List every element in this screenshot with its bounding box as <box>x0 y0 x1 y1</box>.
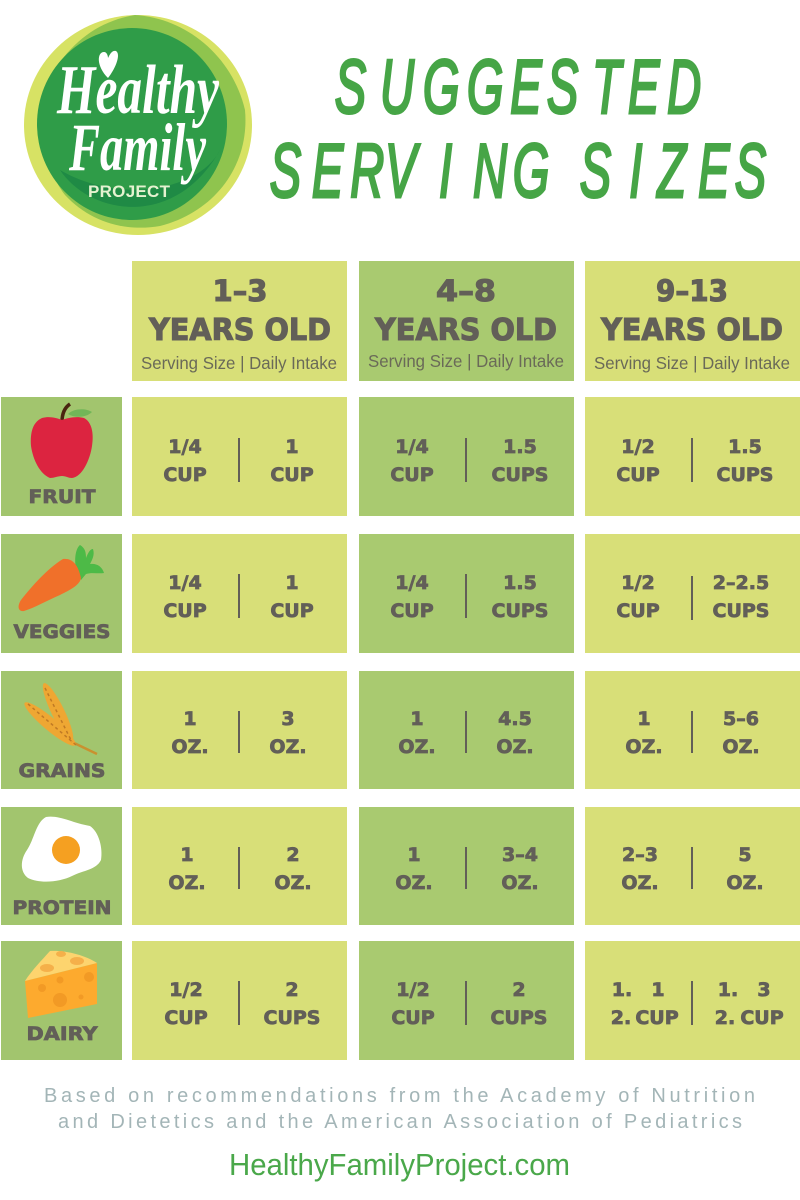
grains cell: 9-13 years <box>585 671 800 789</box>
dairy cell: 9-13 years <box>585 941 800 1060</box>
protein cell: 4-8 years: 3–4 <box>502 844 538 866</box>
grains cell: 1-3 years: 3 <box>281 708 295 730</box>
fruit cell: 9-13 years: 1.5 <box>728 436 762 458</box>
label: protein: PROTEIN <box>12 897 112 919</box>
grains cell: 4-8 years: OZ. <box>496 736 534 758</box>
grains cell: 9-13 years: 5–6 <box>723 708 759 730</box>
dairy cell: 9-13 years: CUP <box>635 1007 679 1029</box>
protein cell: 4-8 years: OZ. <box>395 872 433 894</box>
grains cell: 1-3 years <box>132 671 347 789</box>
footnote: and Dietetics and the American Association of Pediatrics <box>58 1111 742 1133</box>
icon: apple <box>31 404 93 478</box>
row: grains label <box>1 671 122 789</box>
logo wordmark: Family: Family <box>68 109 207 185</box>
grains cell: 1-3 years: OZ. <box>269 736 307 758</box>
fruit cell: 9-13 years: CUPS <box>717 464 773 486</box>
dairy cell: 9-13 years: 2. <box>611 1007 631 1029</box>
protein cell: 1-3 years <box>132 807 347 925</box>
column header: 9-13 years old <box>585 261 800 381</box>
website: HealthyFamilyProject.com <box>229 1147 570 1182</box>
protein cell: 1-3 years: 2 <box>286 844 300 866</box>
protein cell: 4-8 years: OZ. <box>501 872 539 894</box>
dairy cell: 4-8 years: CUP <box>391 1007 435 1029</box>
icon: fried egg <box>22 817 102 882</box>
veggies cell: 1-3 years: CUP <box>163 600 207 622</box>
fruit cell: 4-8 years: CUP <box>390 464 434 486</box>
dairy cell: 1-3 years: CUP <box>164 1007 208 1029</box>
dairy cell: 1-3 years <box>132 941 347 1060</box>
veggies cell: 9-13 years: 2–2.5 <box>713 572 769 594</box>
fruit cell: 9-13 years <box>585 397 800 516</box>
protein cell: 9-13 years <box>585 807 800 925</box>
veggies cell: 9-13 years: 1/2 <box>621 572 655 594</box>
veggies cell: 4-8 years <box>359 534 574 653</box>
row: fruit label <box>1 397 122 516</box>
grains cell: 4-8 years <box>359 671 574 789</box>
label: dairy: DAIRY <box>26 1023 98 1045</box>
grains cell: 9-13 years: OZ. <box>625 736 663 758</box>
dairy cell: 4-8 years: 1/2 <box>396 979 430 1001</box>
dairy cell: 9-13 years: 2. <box>715 1007 735 1029</box>
dairy cell: 9-13 years: 1. <box>718 979 738 1001</box>
row: dairy label <box>1 941 122 1060</box>
protein cell: 9-13 years: 5 <box>738 844 752 866</box>
dairy cell: 4-8 years <box>359 941 574 1060</box>
fruit cell: 4-8 years: 1/4 <box>395 436 429 458</box>
column header: 4-8 years old: YEARS OLD <box>374 313 557 348</box>
fruit cell: 1-3 years: CUP <box>270 464 314 486</box>
icon: carrot <box>19 545 104 611</box>
protein cell: 9-13 years: OZ. <box>726 872 764 894</box>
fruit cell: 9-13 years: CUP <box>616 464 660 486</box>
icon: wheat <box>21 680 97 754</box>
row: veggies label <box>1 534 122 653</box>
dairy cell: 1-3 years: 2 <box>285 979 299 1001</box>
fruit cell: 9-13 years: 1/2 <box>621 436 655 458</box>
fruit cell: 1-3 years <box>132 397 347 516</box>
dairy cell: 9-13 years: 1. <box>612 979 632 1001</box>
protein cell: 1-3 years: 1 <box>180 844 194 866</box>
title <box>270 46 766 214</box>
protein cell: 4-8 years: 1 <box>407 844 421 866</box>
fruit cell: 1-3 years: CUP <box>163 464 207 486</box>
grains cell: 1-3 years: 1 <box>183 708 197 730</box>
protein cell: 9-13 years: 2–3 <box>622 844 658 866</box>
footnote <box>44 1085 755 1133</box>
veggies cell: 4-8 years: CUP <box>390 600 434 622</box>
veggies cell: 1-3 years <box>132 534 347 653</box>
dairy cell: 4-8 years: 2 <box>512 979 526 1001</box>
label: veggies: VEGGIES <box>14 621 110 643</box>
veggies cell: 1-3 years: 1/4 <box>168 572 202 594</box>
row: protein label <box>1 807 122 925</box>
column header: 1-3 years old: 1–3 <box>212 274 268 308</box>
column header: 9-13 years old: YEARS OLD <box>600 313 783 348</box>
logo <box>24 15 252 235</box>
veggies cell: 9-13 years: CUP <box>616 600 660 622</box>
grains cell: 4-8 years: 1 <box>410 708 424 730</box>
grains cell: 4-8 years: OZ. <box>398 736 436 758</box>
veggies cell: 1-3 years: 1 <box>285 572 299 594</box>
fruit cell: 4-8 years <box>359 397 574 516</box>
title: SERVINGSIZES <box>270 130 766 214</box>
veggies cell: 4-8 years: CUPS <box>492 600 548 622</box>
column header: 4-8 years old: Serving Size | Daily Intake <box>368 351 564 371</box>
title: SUGGESTED <box>335 46 701 130</box>
veggies cell: 4-8 years: 1.5 <box>503 572 537 594</box>
column header: 1-3 years old: Serving Size | Daily Intake <box>141 353 337 373</box>
column header: 9-13 years old: Serving Size | Daily Intake <box>594 353 790 373</box>
logo wordmark: Project: PROJECT <box>88 182 171 201</box>
veggies cell: 4-8 years: 1/4 <box>395 572 429 594</box>
dairy cell: 1-3 years: 1/2 <box>169 979 203 1001</box>
grains cell: 4-8 years: 4.5 <box>498 708 532 730</box>
fruit cell: 4-8 years: 1.5 <box>503 436 537 458</box>
fruit cell: 1-3 years: 1 <box>285 436 299 458</box>
dairy cell: 9-13 years: 3 <box>757 979 771 1001</box>
label: fruit: FRUIT <box>28 486 96 508</box>
veggies cell: 1-3 years: CUP <box>270 600 314 622</box>
footnote: Based on recommendations from the Academy of Nutrition <box>44 1085 755 1107</box>
grains cell: 9-13 years: OZ. <box>722 736 760 758</box>
dairy cell: 9-13 years: 1 <box>651 979 665 1001</box>
protein cell: 1-3 years: OZ. <box>168 872 206 894</box>
veggies cell: 9-13 years: CUPS <box>713 600 769 622</box>
column header: 4-8 years old <box>359 261 574 381</box>
column header: 1-3 years old: YEARS OLD <box>148 313 331 348</box>
column header: 1-3 years old <box>132 261 347 381</box>
veggies cell: 9-13 years <box>585 534 800 653</box>
fruit cell: 1-3 years: 1/4 <box>168 436 202 458</box>
dairy cell: 9-13 years: CUP <box>740 1007 784 1029</box>
column header: 4-8 years old: 4–8 <box>436 274 496 308</box>
logo wordmark: Healthy: Healthy <box>56 52 220 129</box>
dairy cell: 4-8 years: CUPS <box>491 1007 547 1029</box>
protein cell: 4-8 years <box>359 807 574 925</box>
protein cell: 9-13 years: OZ. <box>621 872 659 894</box>
dairy cell: 1-3 years: CUPS <box>264 1007 320 1029</box>
fruit cell: 4-8 years: CUPS <box>492 464 548 486</box>
grains cell: 9-13 years: 1 <box>637 708 651 730</box>
icon: cheese <box>25 951 97 1018</box>
grains cell: 1-3 years: OZ. <box>171 736 209 758</box>
column header: 9-13 years old: 9–13 <box>656 274 728 308</box>
label: grains: GRAINS <box>18 760 106 782</box>
protein cell: 1-3 years: OZ. <box>274 872 312 894</box>
logo heart <box>99 51 118 78</box>
